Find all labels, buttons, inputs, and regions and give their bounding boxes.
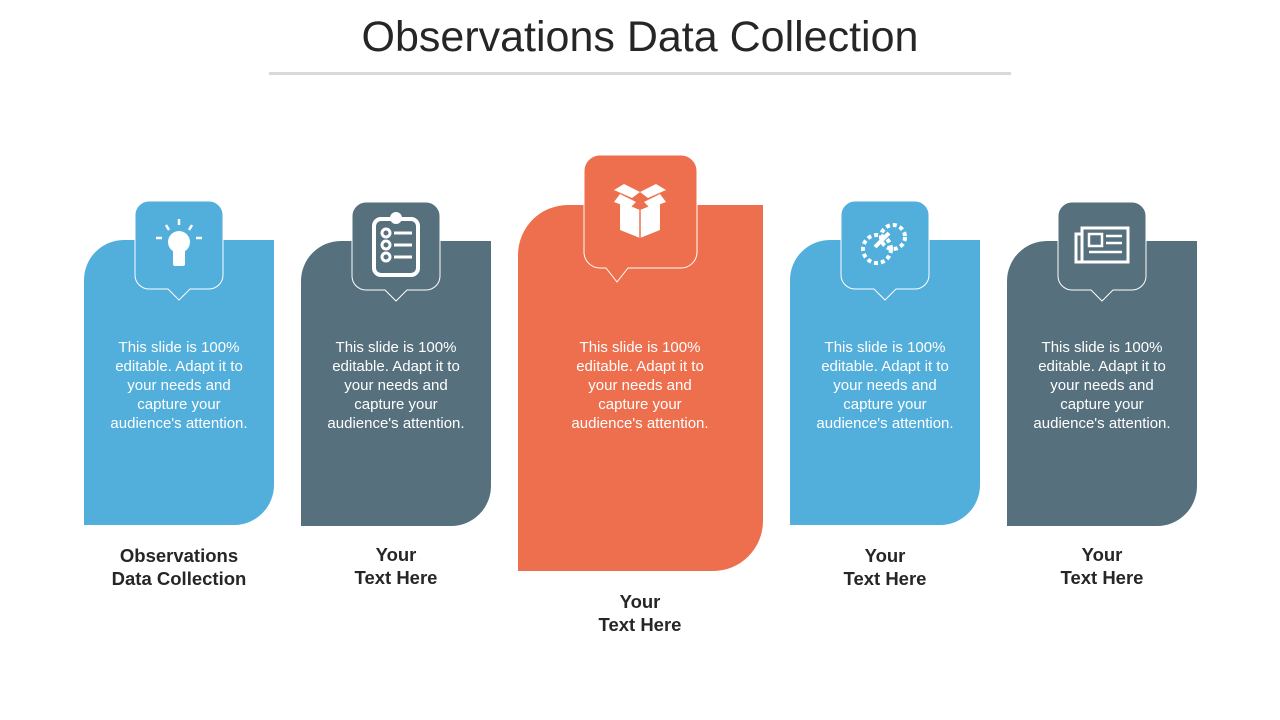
card 5 <box>1007 202 1197 526</box>
label 5 <box>1060 544 1143 588</box>
label 2 <box>354 544 437 588</box>
label 2: Text Here <box>355 567 437 588</box>
title: Observations Data Collection <box>362 13 918 61</box>
label 4 <box>844 545 926 589</box>
card 1 <box>84 201 274 525</box>
card 5 text: This slide is 100% editable. Adapt it to your needs and capture your audience's attention. <box>1033 339 1171 432</box>
card 4 text: This slide is 100% editable. Adapt it to your needs and capture your audience's attention. <box>816 339 954 432</box>
tab 4 icon: gears <box>841 201 929 300</box>
card 2 <box>301 202 491 526</box>
label 3: Your <box>620 591 660 612</box>
tab 1 icon: light bulb <box>135 201 223 300</box>
label 5: Your <box>1082 544 1122 565</box>
card 4 <box>790 201 980 525</box>
card 1 text: This slide is 100% editable. Adapt it to your needs and capture your audience's attention. <box>110 339 248 432</box>
label 1: Data Collection <box>112 568 246 589</box>
card 2 text: This slide is 100% editable. Adapt it to your needs and capture your audience's attention. <box>327 339 465 432</box>
label 4: Your <box>865 545 905 566</box>
label 3: Text Here <box>599 614 681 635</box>
label 4: Text Here <box>844 568 926 589</box>
tab 2 icon: clipboard <box>352 202 440 301</box>
tab 5 icon: newspaper <box>1058 202 1146 301</box>
label 2: Your <box>376 544 416 565</box>
card 3 text: This slide is 100% editable. Adapt it to your needs and capture your audience's attention. <box>571 339 709 432</box>
label 1: Observations <box>120 545 238 566</box>
tab 3 icon: box <box>584 155 697 282</box>
card 3 <box>518 155 763 571</box>
label 3 <box>598 591 681 635</box>
label 5: Text Here <box>1061 567 1143 588</box>
label 1 <box>112 545 246 589</box>
title underline <box>269 72 1011 75</box>
